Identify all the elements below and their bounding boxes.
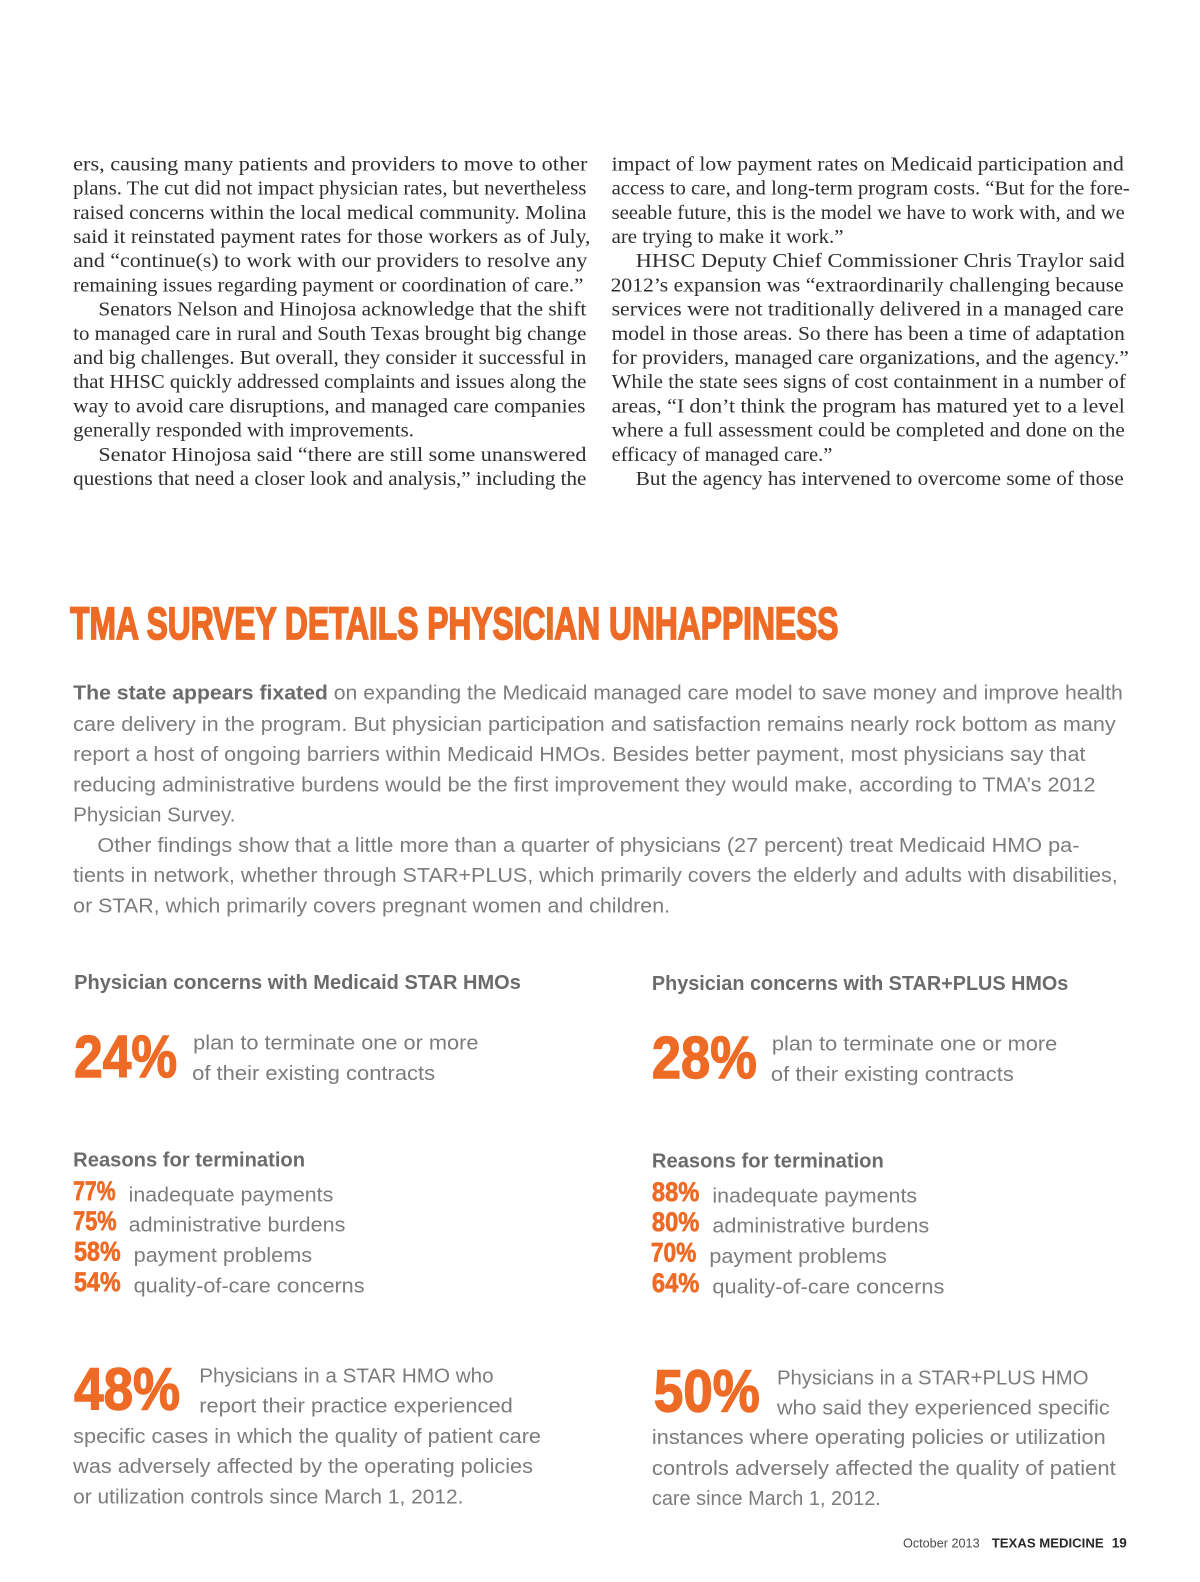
stat: 50 percent quality affected (652, 1358, 1116, 1510)
text block: article column left (73, 153, 590, 490)
text block: survey introduction: reducing administrative burdens would be the first improvement they would make, according to TMA’s 2012 (73, 775, 1096, 797)
list: termination reasons: 80% (652, 1206, 699, 1237)
text block: article column right: services were not traditionally delivered in a managed care (612, 299, 1124, 321)
list: termination reasons: 88% (652, 1176, 699, 1207)
list: termination reasons: 77% (73, 1175, 116, 1206)
stat: 48 percent quality affected: 48% (74, 1356, 180, 1423)
text block: survey introduction: The state appears fixated on expanding the Medicaid managed care model to save money and improve health (73, 683, 1123, 705)
text block: article column left: ers, causing many patients and providers to move to other (73, 153, 588, 175)
stat: 28 percent plan to terminate: 28% (652, 1024, 757, 1091)
list: termination reasons (651, 1176, 944, 1299)
stat: 24 percent plan to terminate (74, 1023, 479, 1090)
stat: 50 percent quality affected: Physicians in a STAR+PLUS HMO (777, 1367, 1089, 1389)
panel heading: Physician concerns with STAR+PLUS HMOs (652, 973, 1068, 995)
subheading: reasons for termination: Reasons for termination (652, 1151, 884, 1173)
list: termination reasons: 70% (651, 1236, 696, 1267)
stat: 50 percent quality affected: who said they experienced specific (776, 1398, 1110, 1420)
text block: survey introduction: tients in network, whether through STAR+PLUS, which primarily covers the elderly and adults with disabilities, (73, 865, 1118, 887)
stat: 24 percent plan to terminate: 24% (74, 1023, 177, 1090)
stat: 28 percent plan to terminate: plan to terminate one or more (772, 1034, 1057, 1056)
list: termination reasons: payment problems (134, 1245, 312, 1267)
text block: article column right: impact of low payment rates on Medicaid participation and (612, 153, 1124, 175)
list: termination reasons: inadequate payments (712, 1185, 917, 1207)
stat: 48 percent quality affected: report their practice experienced (199, 1396, 513, 1418)
stat: 50 percent quality affected: 50% (654, 1358, 760, 1425)
text block: survey introduction: or STAR, which primarily covers pregnant women and children. (73, 895, 670, 917)
panel: STAR+PLUS HMO concerns (651, 973, 1116, 1510)
text block: article column right: 2012’s expansion was “extraordinarily challenging because (611, 274, 1124, 296)
list: termination reasons: 54% (74, 1266, 121, 1297)
list: termination reasons: administrative burdens (712, 1216, 929, 1238)
text block: article column left: generally responded with improvements. (73, 420, 414, 442)
text block: article column left: way to avoid care disruptions, and managed care companies (73, 395, 586, 417)
list: termination reasons: payment problems (709, 1246, 887, 1268)
footer: date, magazine name, page number: October 2013 (903, 1537, 980, 1551)
text block: survey introduction: care delivery in the program. But physician participation and satisfaction remains nearly rock bottom as many (73, 714, 1117, 736)
list: termination reasons: 64% (652, 1267, 699, 1298)
panel: Medicaid STAR HMO concerns (72, 972, 541, 1508)
list: termination reasons: 58% (74, 1235, 121, 1266)
list: termination reasons (73, 1175, 365, 1298)
text block: article column right (611, 153, 1130, 490)
stat: 48 percent quality affected: or utilization controls since March 1, 2012. (73, 1486, 463, 1508)
text block: survey introduction: Other findings show that a little more than a quarter of physicians (27 percent) treat Medicaid HMO pa- (97, 835, 1079, 857)
stat: 24 percent plan to terminate: of their existing contracts (192, 1063, 435, 1085)
text block: article column right: where a full assessment could be completed and done on the (612, 420, 1125, 442)
stat: 48 percent quality affected: was adversely affected by the operating policies (72, 1456, 533, 1478)
text block: survey introduction: Physician Survey. (73, 805, 236, 827)
text block: article column left: plans. The cut did not impact physician rates, but nevertheless (73, 178, 587, 200)
text block: article column right: access to care, and long-term program costs. “But for the fore- (612, 178, 1130, 200)
list: termination reasons: administrative burdens (129, 1215, 345, 1237)
text block: article column right: But the agency has intervened to overcome some of those (636, 468, 1124, 490)
text block: article column left: and “continue(s) to work with our providers to resolve any (73, 250, 587, 272)
stat: 50 percent quality affected: controls adversely affected the quality of patient (652, 1458, 1116, 1480)
list: termination reasons: quality-of-care concerns (134, 1276, 365, 1298)
stat: 50 percent quality affected: instances where operating policies or utilization (652, 1427, 1106, 1449)
text block: article column left: Senator Hinojosa said “there are still some unanswered (98, 444, 586, 466)
text block: article column left: raised concerns within the local medical community. Molina (73, 202, 586, 224)
footer: date, magazine name, page number (903, 1535, 1127, 1551)
text block: article column left: to managed care in rural and South Texas brought big change (73, 323, 586, 345)
subheading: reasons for termination: Reasons for termination (73, 1150, 305, 1172)
heading: infographic title: TMA SURVEY DETAILS PHYSICIAN UNHAPPINESS (70, 598, 838, 649)
text block: article column right: efficacy of managed care.” (612, 444, 832, 466)
text block: article column right: model in those areas. So there has been a time of adaptation (612, 323, 1125, 345)
footer: date, magazine name, page number: TEXAS MEDICINE (992, 1536, 1104, 1551)
list: termination reasons: inadequate payments (129, 1184, 333, 1206)
text block: article column right: seeable future, this is the model we have to work with, and we (612, 202, 1125, 224)
text block: article column right: While the state sees signs of cost containment in a number of (612, 371, 1126, 393)
text block: article column left: Senators Nelson and Hinojosa acknowledge that the shift (98, 299, 587, 321)
text block: article column left: questions that need a closer look and analysis,” including the (73, 468, 586, 490)
stat: 50 percent quality affected: care since March 1, 2012. (652, 1488, 881, 1510)
list: termination reasons: quality-of-care concerns (712, 1277, 944, 1299)
stat: 48 percent quality affected: Physicians in a STAR HMO who (199, 1365, 494, 1387)
text block: article column left: that HHSC quickly addressed complaints and issues along the (73, 371, 586, 393)
stat: 24 percent plan to terminate: plan to terminate one or more (193, 1033, 479, 1055)
stat: 28 percent plan to terminate (652, 1024, 1057, 1091)
list: termination reasons: 75% (73, 1205, 117, 1236)
stat: 28 percent plan to terminate: of their existing contracts (771, 1064, 1014, 1086)
text block: article column right: are trying to make it work.” (612, 226, 844, 248)
text block: article column left: said it reinstated payment rates for those workers as of July, (73, 226, 590, 248)
text block: article column right: areas, “I don’t think the program has matured yet to a level (612, 395, 1125, 417)
text block: article column left: remaining issues regarding payment or coordination of care.” (73, 274, 583, 296)
text block: article column right: HHSC Deputy Chief Commissioner Chris Traylor said (636, 250, 1125, 272)
stat: 48 percent quality affected: specific cases in which the quality of patient care (73, 1426, 541, 1448)
text block: survey introduction: report a host of ongoing barriers within Medicaid HMOs. Besides better payment, most physicians say that (73, 744, 1086, 766)
text block: article column left: and big challenges. But overall, they consider it successful in (73, 347, 586, 369)
footer: date, magazine name, page number: 19 (1112, 1535, 1127, 1551)
text block: article column right: for providers, managed care organizations, and the agency.” (612, 347, 1129, 369)
panel heading: Physician concerns with Medicaid STAR HMOs (74, 972, 521, 994)
text block: survey introduction (73, 683, 1123, 917)
stat: 48 percent quality affected (72, 1356, 541, 1508)
